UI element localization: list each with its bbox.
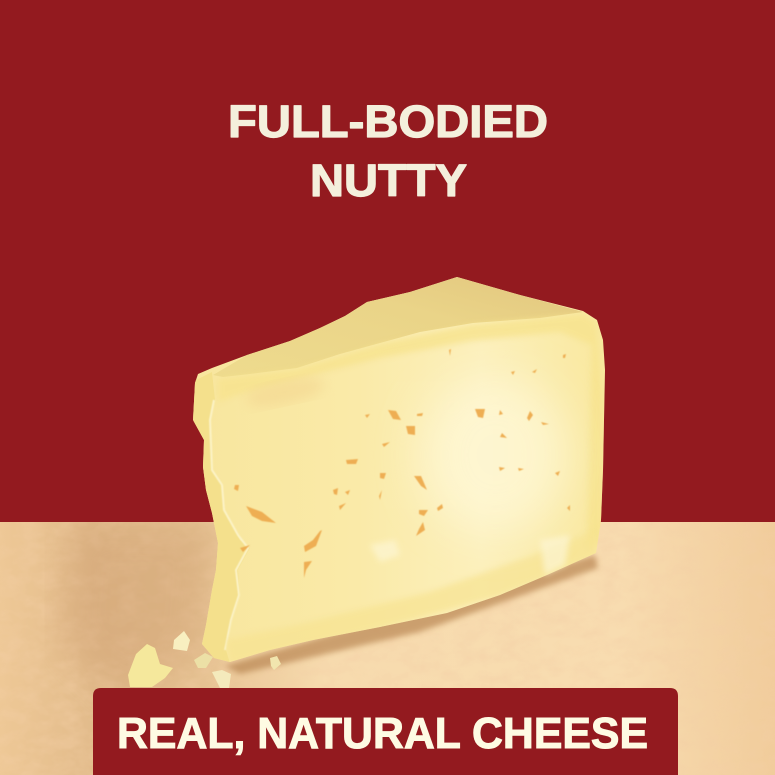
- cheese wedge: [190, 277, 605, 670]
- small crumb two: [194, 653, 213, 668]
- warm tint upper left: [243, 372, 327, 412]
- title: Full-Bodied Nutty: [228, 96, 548, 206]
- bright centre glow: [420, 375, 570, 535]
- title: Full-Bodied Nutty: FULL-BODIED: [228, 96, 548, 147]
- bottom band: [226, 530, 596, 664]
- banner background: [93, 688, 678, 775]
- banner text: REAL, NATURAL CHEESE: [117, 709, 648, 758]
- cheese holes: [234, 349, 570, 578]
- top rind: [213, 277, 583, 377]
- rind inner shading and edge band: [190, 314, 604, 670]
- small crumb three: [212, 670, 231, 688]
- left crumbly edge: [190, 372, 250, 670]
- large crumb: [128, 644, 173, 687]
- cheese crumbs: [128, 631, 281, 688]
- wooden table surface: [0, 522, 775, 775]
- small crumb four: [270, 656, 281, 670]
- cheese body: [193, 277, 605, 662]
- bottom banner: Real, Natural Cheese: [93, 688, 678, 775]
- title: Full-Bodied Nutty: NUTTY: [310, 155, 467, 206]
- pale crumbly highlights: [370, 535, 570, 575]
- small crumb one: [173, 631, 190, 651]
- cheese shadow on table: [225, 555, 598, 674]
